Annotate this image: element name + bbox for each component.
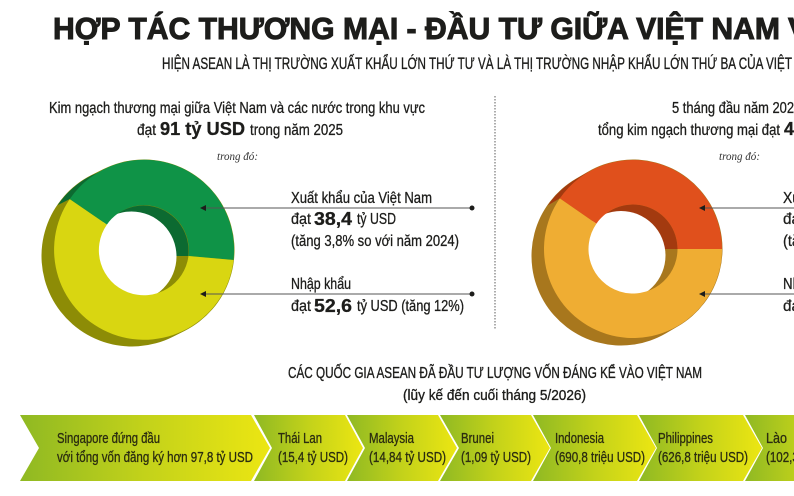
chevron: Malaysia: Malaysia	[369, 431, 415, 447]
note: trong đó: trong đó:	[217, 149, 258, 163]
chevron band: investment by country	[20, 415, 794, 481]
panel heading: 2025 trade value: trong năm 2025	[250, 122, 343, 139]
chevron: Philippines	[639, 415, 762, 481]
chevron: Brunei: Brunei	[461, 431, 494, 447]
panel heading: 2025 trade value: 91 tỷ USD	[160, 119, 245, 139]
chevron: Lào: Lào	[766, 431, 787, 447]
chevron: Thái Lan: Thái Lan	[278, 431, 322, 447]
callout: imports 2025: Nhập khẩu	[291, 275, 351, 293]
section heading: ASEAN investors	[288, 364, 702, 404]
callout: imports 5 months	[699, 276, 794, 315]
callout: exports 2025: 38,4	[314, 209, 352, 229]
callout: exports 2025: Xuất khẩu của Việt Nam	[291, 189, 432, 207]
chevron: Brunei: (1,09 tỷ USD)	[461, 450, 531, 466]
chevron: Indonesia	[533, 415, 656, 481]
panel heading: 5-month trade value	[598, 100, 794, 139]
chevron: Philippines: Philippines	[658, 431, 713, 447]
chevron: Thái Lan: (15,4 tỷ USD)	[278, 450, 348, 466]
callout: imports 2025: đạt	[291, 298, 311, 315]
title: HỢP TÁC THƯƠNG MẠI - ĐẦU TƯ GIỮA VIỆT NAM	[53, 10, 780, 46]
section heading: ASEAN investors: (lũy kế đến cuối tháng 5/2026)	[403, 387, 586, 404]
callout: imports 2025	[200, 275, 474, 316]
panel: trade 2025	[49, 100, 474, 340]
callout: exports 2025: (tăng 3,8% so với năm 2024)	[291, 233, 459, 250]
callout: imports 2025: tỷ USD (tăng 12%)	[357, 298, 464, 315]
chevron: Philippines: (626,8 triệu USD)	[658, 450, 748, 466]
panel heading: 5-month trade value: 4	[784, 119, 794, 139]
donut chart: 2025 exports and imports	[54, 160, 234, 340]
note: trong đó: trong đó:	[719, 149, 760, 163]
chevron: Brunei	[440, 415, 550, 481]
callout: exports 2025	[200, 189, 474, 250]
chevron: Singapore: với tổng vốn đăng ký hơn 97,8 tỷ USD	[57, 450, 253, 466]
chevron: Malaysia: (14,84 tỷ USD)	[369, 450, 446, 466]
chevron: Lào	[745, 415, 794, 481]
chevron: Malaysia	[347, 415, 457, 481]
panel: trade first 5 months	[544, 100, 794, 338]
callout: exports 2025: tỷ USD	[357, 211, 396, 228]
donut chart: 5-month exports and imports	[544, 160, 722, 338]
callout: imports 2025: 52,6	[314, 296, 352, 316]
panel heading: 2025 trade value: đạt	[137, 122, 156, 139]
chevron: Singapore	[20, 415, 270, 481]
panel heading: 2025 trade value	[49, 100, 425, 139]
chevron: Indonesia: Indonesia	[555, 431, 605, 447]
chevron: Thái Lan	[254, 415, 363, 481]
callout: exports 2025: đạt	[291, 211, 311, 228]
panel heading: 2025 trade value: Kim ngạch thương mại giữa Việt Nam và các nước trong khu vực	[49, 100, 425, 117]
chevron: Indonesia: (690,8 triệu USD)	[555, 450, 645, 466]
callout: exports 5 months	[699, 190, 794, 250]
chevron: Singapore: Singapore đứng đầu	[57, 431, 160, 447]
